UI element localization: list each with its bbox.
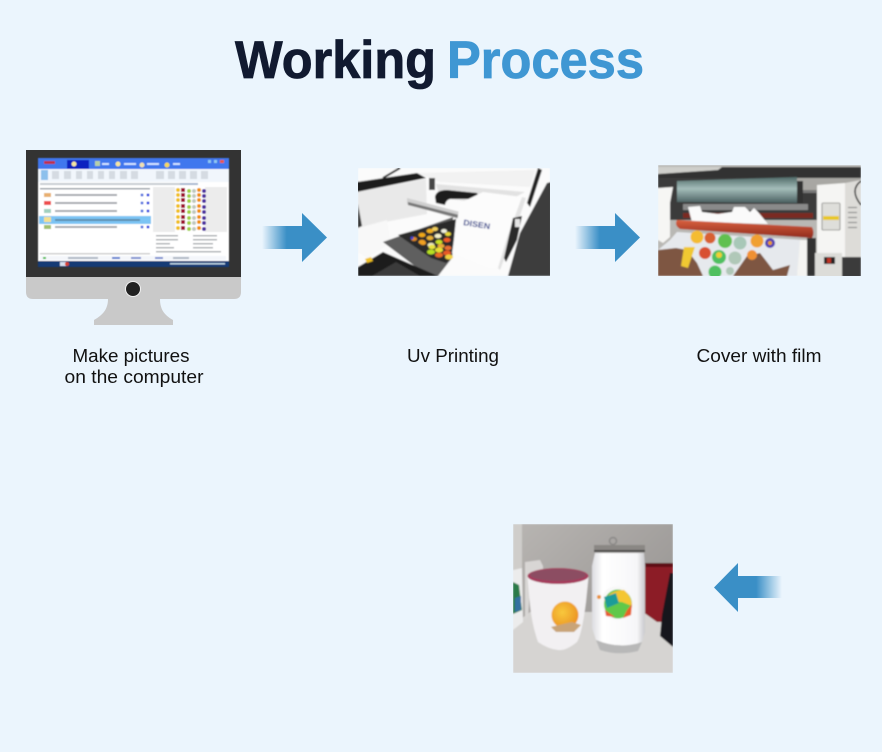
background items left xyxy=(513,524,522,570)
white film edge xyxy=(688,206,768,224)
step label: make pictures xyxy=(64,346,204,387)
left inner wall xyxy=(358,179,427,228)
arrow: step 2 to step 3 xyxy=(575,213,640,262)
platen xyxy=(383,217,453,276)
step label: cover with film: Cover with film xyxy=(696,346,822,366)
left white side frame xyxy=(658,187,673,243)
print head housing with DISEN logo xyxy=(450,192,516,254)
left hand xyxy=(658,248,703,276)
monitor bezel xyxy=(26,150,241,277)
arrow: step 1 to step 2 xyxy=(262,213,327,262)
top dark strip xyxy=(658,167,861,178)
software screen xyxy=(38,158,229,267)
step label: make pictures: Make pictures xyxy=(72,346,190,366)
red roller xyxy=(676,220,814,238)
left white box xyxy=(382,221,386,222)
sticker sheet xyxy=(658,232,803,276)
silver can xyxy=(594,545,645,552)
icon: computer monitor showing design software xyxy=(26,150,241,325)
shelf surface xyxy=(513,612,673,673)
photo: finished mug and can with stickers xyxy=(513,524,673,673)
dark side panel xyxy=(508,182,551,276)
lower black tray xyxy=(358,252,438,276)
power button xyxy=(126,282,140,296)
red cup xyxy=(643,563,673,622)
film roll xyxy=(677,177,797,203)
right side mechanics xyxy=(527,168,542,207)
stickers on platen xyxy=(410,227,453,260)
stickers on sheet xyxy=(690,230,775,278)
photo: UV printer printing stickers xyxy=(357,168,551,276)
step label: make pictures: on the computer xyxy=(64,367,204,387)
title: Working xyxy=(235,31,436,90)
white mug xyxy=(528,577,588,650)
black cable carrier xyxy=(435,190,480,205)
upper frame xyxy=(423,171,534,186)
right hand xyxy=(733,253,790,276)
back interior xyxy=(436,184,524,201)
arrow: step 3 to step 4 xyxy=(714,563,782,612)
title: Process xyxy=(447,31,644,90)
monitor stand xyxy=(94,299,173,325)
title xyxy=(235,31,644,90)
photo: laminator covering stickers with film xyxy=(658,165,861,278)
photo: UV printer printing stickers: DISEN xyxy=(463,218,491,231)
step label: UV printing: Uv Printing xyxy=(407,346,499,366)
black cup xyxy=(660,573,673,647)
control panel xyxy=(817,183,845,257)
monitor chin xyxy=(26,277,241,299)
can sticker xyxy=(597,586,633,620)
